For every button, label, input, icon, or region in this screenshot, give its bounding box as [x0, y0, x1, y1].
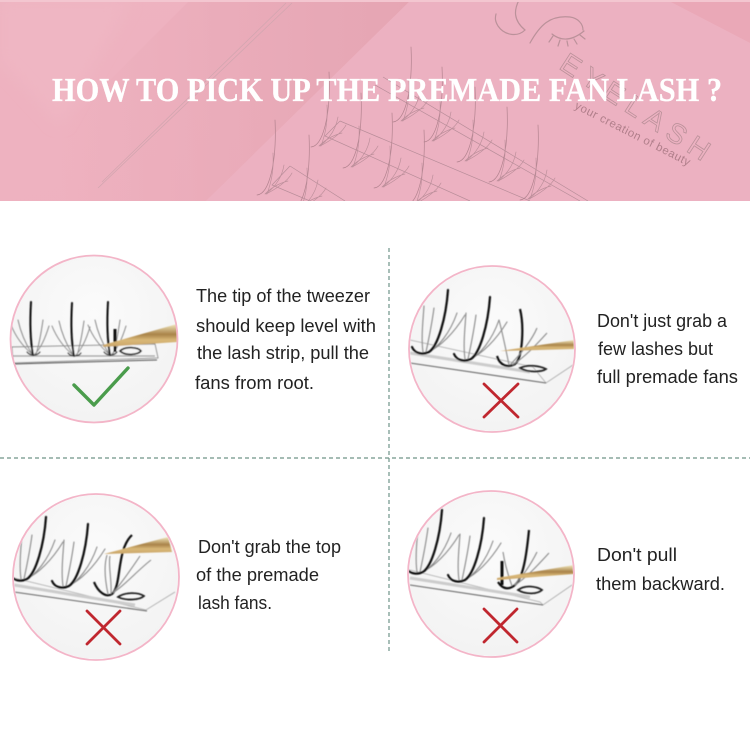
photo circle: top grab — [10, 494, 179, 660]
icon: red cross — [484, 384, 518, 417]
text: top grab warning: lash fans. — [198, 592, 272, 613]
banner: pink photo of lash tray — [0, 0, 750, 210]
banner: EYELASH wordmark: EYELASH — [555, 47, 716, 167]
text: top grab warning — [196, 536, 341, 613]
text: few lashes warning: full premade fans — [597, 366, 738, 387]
text: backward warning: them backward. — [596, 573, 725, 594]
banner: lash fans — [257, 47, 555, 210]
icon: red cross — [484, 609, 517, 642]
text: backward warning — [596, 544, 725, 594]
text: correct instruction: The tip of the tweezer — [196, 285, 370, 306]
text: correct instruction: the lash strip, pull the — [197, 342, 369, 363]
icon: green check mark — [74, 368, 128, 405]
icon: red cross — [87, 611, 120, 644]
text: few lashes warning — [597, 310, 738, 387]
text: few lashes warning: Don't just grab a — [597, 310, 728, 331]
text: top grab warning: Don't grab the top — [198, 536, 341, 557]
banner: light tray panel — [206, 0, 750, 201]
photo circle: few lashes — [409, 266, 575, 432]
divider: horizontal dashed — [0, 457, 750, 459]
text: correct instruction: should keep level with — [196, 315, 376, 336]
divider: vertical dashed — [388, 248, 390, 652]
banner: lash strips — [272, 77, 588, 201]
text: correct instruction: fans from root. — [195, 372, 314, 393]
panel: don't grab the top — [10, 494, 341, 660]
banner: SF logo — [495, 0, 585, 46]
banner: tagline: your creation of beauty — [573, 100, 692, 169]
text: few lashes warning: few lashes but — [598, 338, 713, 359]
photo circle: level tweezer — [10, 256, 178, 422]
text: correct instruction — [195, 285, 376, 393]
banner: tweezer outline lines — [98, 3, 292, 188]
panel: correct technique — [10, 256, 376, 422]
text: top grab warning: of the premade — [196, 564, 319, 585]
text: backward warning: Don't pull — [597, 544, 677, 565]
photo circle: backward pull — [406, 491, 574, 657]
panel: don't grab a few lashes — [409, 266, 738, 432]
panel: don't pull backward — [406, 491, 725, 657]
